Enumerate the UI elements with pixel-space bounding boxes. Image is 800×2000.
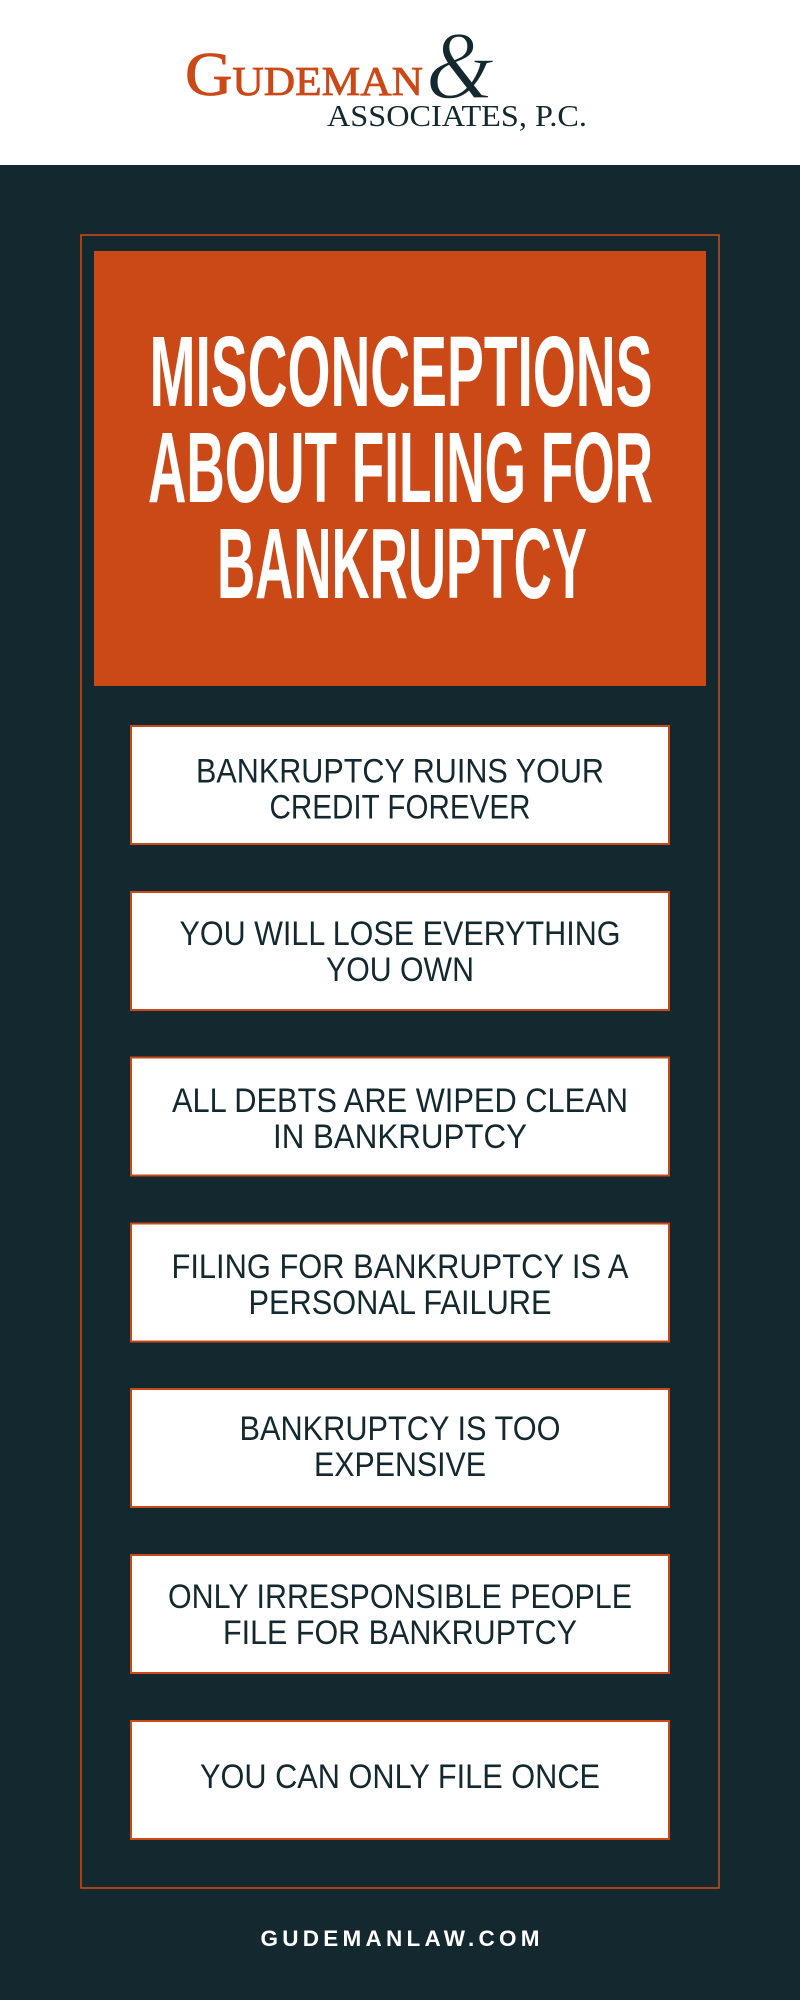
card text: FILING FOR BANKRUPTCY IS A bbox=[172, 1248, 629, 1286]
logo header bbox=[0, 0, 800, 165]
card text bbox=[240, 1410, 560, 1484]
card text: BANKRUPTCY IS TOO bbox=[240, 1410, 560, 1448]
card text: YOU WILL LOSE EVERYTHING bbox=[180, 915, 620, 953]
card text: PERSONAL FAILURE bbox=[248, 1284, 552, 1322]
outer frame bbox=[81, 235, 719, 1888]
card text bbox=[180, 915, 620, 989]
card text bbox=[196, 752, 604, 826]
logo ampersand: & bbox=[426, 12, 494, 119]
card: ruins credit bbox=[131, 726, 669, 844]
footer url: GUDEMANLAW.COM bbox=[260, 1926, 540, 1951]
card text: ALL DEBTS ARE WIPED CLEAN bbox=[172, 1082, 628, 1120]
card: personal failure bbox=[131, 1224, 669, 1342]
card: file once bbox=[131, 1721, 669, 1839]
card text bbox=[172, 1248, 629, 1322]
card: irresponsible people bbox=[131, 1555, 669, 1673]
logo wordmark: Associates: ASSOCIATES, P.C. bbox=[327, 99, 587, 133]
card: lose everything bbox=[131, 892, 669, 1010]
card text bbox=[168, 1578, 632, 1652]
card text: YOU CAN ONLY FILE ONCE bbox=[200, 1758, 600, 1796]
card text: YOU OWN bbox=[326, 951, 474, 989]
card text: EXPENSIVE bbox=[314, 1446, 486, 1484]
card text: CREDIT FOREVER bbox=[270, 788, 530, 826]
card: too expensive bbox=[131, 1389, 669, 1507]
card text: FILE FOR BANKRUPTCY bbox=[223, 1614, 577, 1652]
title panel bbox=[94, 251, 706, 686]
card: debts wiped bbox=[131, 1058, 669, 1176]
title bbox=[148, 316, 653, 620]
card text: BANKRUPTCY RUINS YOUR bbox=[196, 752, 604, 790]
logo wordmark: Gudeman: GUDEMAN bbox=[185, 41, 423, 109]
card text: ONLY IRRESPONSIBLE PEOPLE bbox=[168, 1578, 632, 1616]
card text bbox=[172, 1082, 628, 1156]
card text: IN BANKRUPTCY bbox=[273, 1118, 527, 1156]
